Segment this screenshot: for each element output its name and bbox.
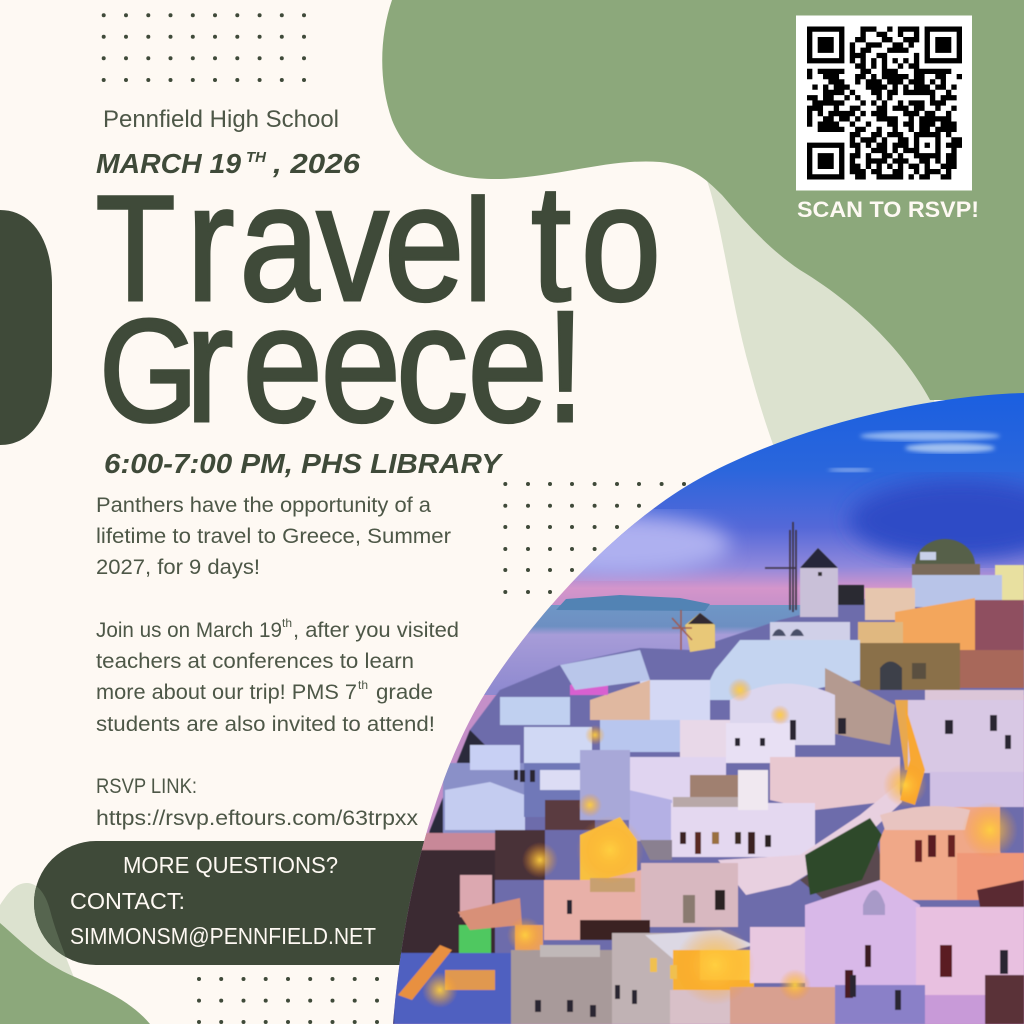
body text: RSVP link: RSVP LINK: — [96, 775, 197, 798]
date: MARCH 19 — [96, 148, 241, 179]
right lower buildings — [730, 700, 1024, 1024]
body text: invitation: th — [358, 678, 368, 692]
contact text: CONTACT: — [70, 888, 185, 914]
body text: intro — [96, 494, 451, 579]
title: e — [468, 271, 548, 456]
title: o — [581, 150, 661, 335]
title: e — [384, 150, 464, 335]
date — [96, 148, 360, 179]
title: r — [185, 271, 233, 456]
title: e — [243, 271, 323, 456]
time and place: 6:00-7:00 PM, PHS LIBRARY — [104, 448, 503, 479]
light blob bottom left — [0, 883, 75, 1024]
title: e — [321, 271, 401, 456]
contact text: SIMMONSM@PENNFIELD.NET — [70, 923, 376, 949]
title: r — [186, 150, 235, 335]
title: T — [96, 164, 175, 332]
title: G — [99, 289, 198, 452]
body text: invitation: teachers at conferences to learn — [96, 650, 414, 673]
body text: invitation: Join us on March 19 — [96, 619, 282, 642]
title: l — [464, 170, 527, 331]
contact text — [70, 852, 376, 949]
windmill small — [672, 610, 715, 652]
school name: Pennfield High School — [103, 106, 339, 133]
left-side houses — [402, 727, 630, 953]
sage blob top right — [382, 0, 1024, 400]
left dark pill — [0, 210, 52, 445]
title: c — [396, 271, 468, 456]
body text: RSVP link: https://rsvp.eftours.com/63trpxx — [96, 807, 419, 830]
body text: intro: lifetime to travel to Greece, Summer — [96, 525, 451, 548]
QR caption: SCAN TO RSVP! — [797, 197, 979, 222]
date: TH — [246, 149, 267, 166]
right-side buildings — [858, 565, 1024, 770]
contact text: MORE QUESTIONS? — [123, 852, 338, 878]
upper white buildings — [500, 622, 895, 760]
body text: invitation: th — [282, 616, 292, 630]
windows and shadows — [514, 715, 1011, 1017]
body text: intro: 2027, for 9 days! — [96, 556, 260, 579]
title — [96, 150, 661, 456]
domed church — [911, 538, 981, 576]
dot grid top — [102, 13, 306, 82]
body text: invitation: students are also invited to attend! — [96, 713, 435, 736]
dot grid middle — [503, 482, 686, 594]
body text: intro: Panthers have the opportunity of a — [96, 494, 431, 517]
body text: invitation — [96, 616, 459, 736]
body text: RSVP link — [96, 775, 419, 830]
date: , 2026 — [272, 148, 360, 179]
central terraces — [629, 723, 902, 927]
body text: invitation: more about our trip! PMS 7 — [96, 681, 357, 704]
title: a — [239, 150, 320, 335]
dot grid bottom — [197, 977, 379, 1024]
sage blob bottom left — [0, 923, 150, 1024]
town backdrop — [393, 522, 1024, 1024]
glowing houses — [394, 817, 754, 1024]
title: v — [317, 150, 389, 335]
title: ! — [546, 279, 584, 455]
body text: invitation: grade — [376, 681, 433, 704]
light sage blob — [705, 175, 940, 450]
title: t — [531, 150, 571, 335]
body text: invitation: , after you visited — [293, 619, 459, 642]
contact pill — [34, 841, 424, 965]
lamp glows — [422, 678, 1018, 1008]
QR code — [796, 16, 972, 190]
windmill large — [765, 522, 864, 617]
photo: Santorini at dusk — [390, 390, 1024, 1024]
